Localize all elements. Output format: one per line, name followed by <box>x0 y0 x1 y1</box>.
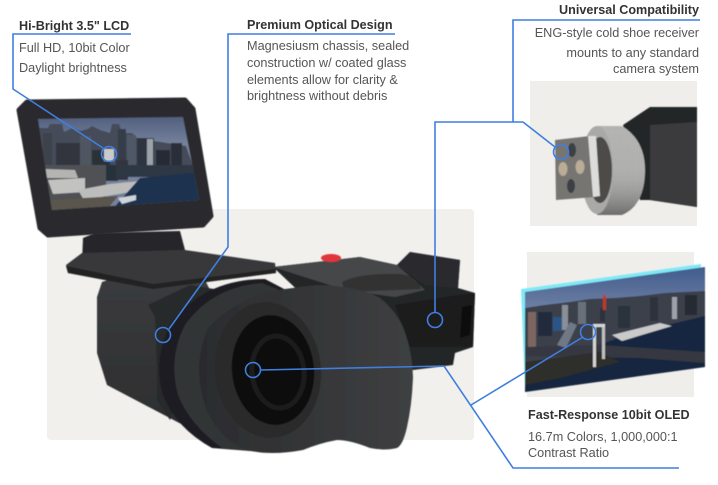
panel: cold shoe backdrop <box>530 81 697 226</box>
knob front ring <box>581 126 613 214</box>
record button <box>321 254 341 262</box>
callout: Premium Optical Design <box>156 18 409 342</box>
monitor screen image <box>36 115 201 212</box>
leader line <box>261 337 679 468</box>
marker: panel <box>580 324 596 340</box>
tokyo skyline photo <box>520 265 706 395</box>
OLED screen image <box>520 264 706 395</box>
description: brightness without debris <box>247 89 387 103</box>
knurled knob <box>597 126 645 215</box>
cyan screen edge <box>521 264 705 389</box>
leader line <box>435 20 700 312</box>
shoe plate <box>555 136 595 200</box>
mount plate <box>66 250 276 289</box>
description: camera system <box>613 62 699 76</box>
focus ring <box>159 279 305 452</box>
eyecup <box>199 285 413 453</box>
hinge <box>82 231 185 262</box>
camera illustration <box>66 231 475 453</box>
description: construction w/ coated glass <box>247 56 406 70</box>
heading: Universal Compatibility <box>559 3 699 17</box>
marker: shoe <box>554 144 568 160</box>
heading: Premium Optical Design <box>247 18 393 32</box>
marker: eyepiece <box>246 362 260 378</box>
camera body <box>97 276 215 426</box>
knob shading <box>597 126 645 215</box>
mount arm <box>623 107 697 207</box>
cold shoe receiver photo <box>555 107 697 215</box>
leader line <box>13 34 131 148</box>
description: Daylight brightness <box>19 61 127 75</box>
callout: Universal Compatibility <box>428 3 700 328</box>
panel: camera backdrop <box>47 209 474 440</box>
rear housing <box>273 252 475 370</box>
description: elements allow for clarity & <box>247 73 398 87</box>
body shoulder <box>148 285 220 420</box>
leader line <box>169 34 395 329</box>
lens opening <box>208 297 328 443</box>
callout: Fast-Response OLED <box>246 324 690 468</box>
callout: Hi-Bright LCD <box>13 19 131 162</box>
description: ENG-style cold shoe receiver <box>535 26 700 40</box>
description: Full HD, 10bit Color <box>19 41 130 55</box>
monitor shell <box>19 100 211 235</box>
screws <box>568 143 576 157</box>
marker <box>156 328 170 342</box>
heading: Hi-Bright 3.5" LCD <box>19 19 129 33</box>
heading: Fast-Response 10bit OLED <box>528 408 690 422</box>
description: Magnesiusm chassis, sealed <box>247 39 409 53</box>
marker <box>102 146 116 162</box>
panel: OLED backdrop <box>527 252 694 397</box>
description: mounts to any standard <box>566 46 699 60</box>
description: Contrast Ratio <box>528 446 609 460</box>
description: 16.7m Colors, 1,000,000:1 <box>528 430 678 444</box>
LCD monitor <box>19 100 211 235</box>
marker: housing <box>428 312 442 328</box>
